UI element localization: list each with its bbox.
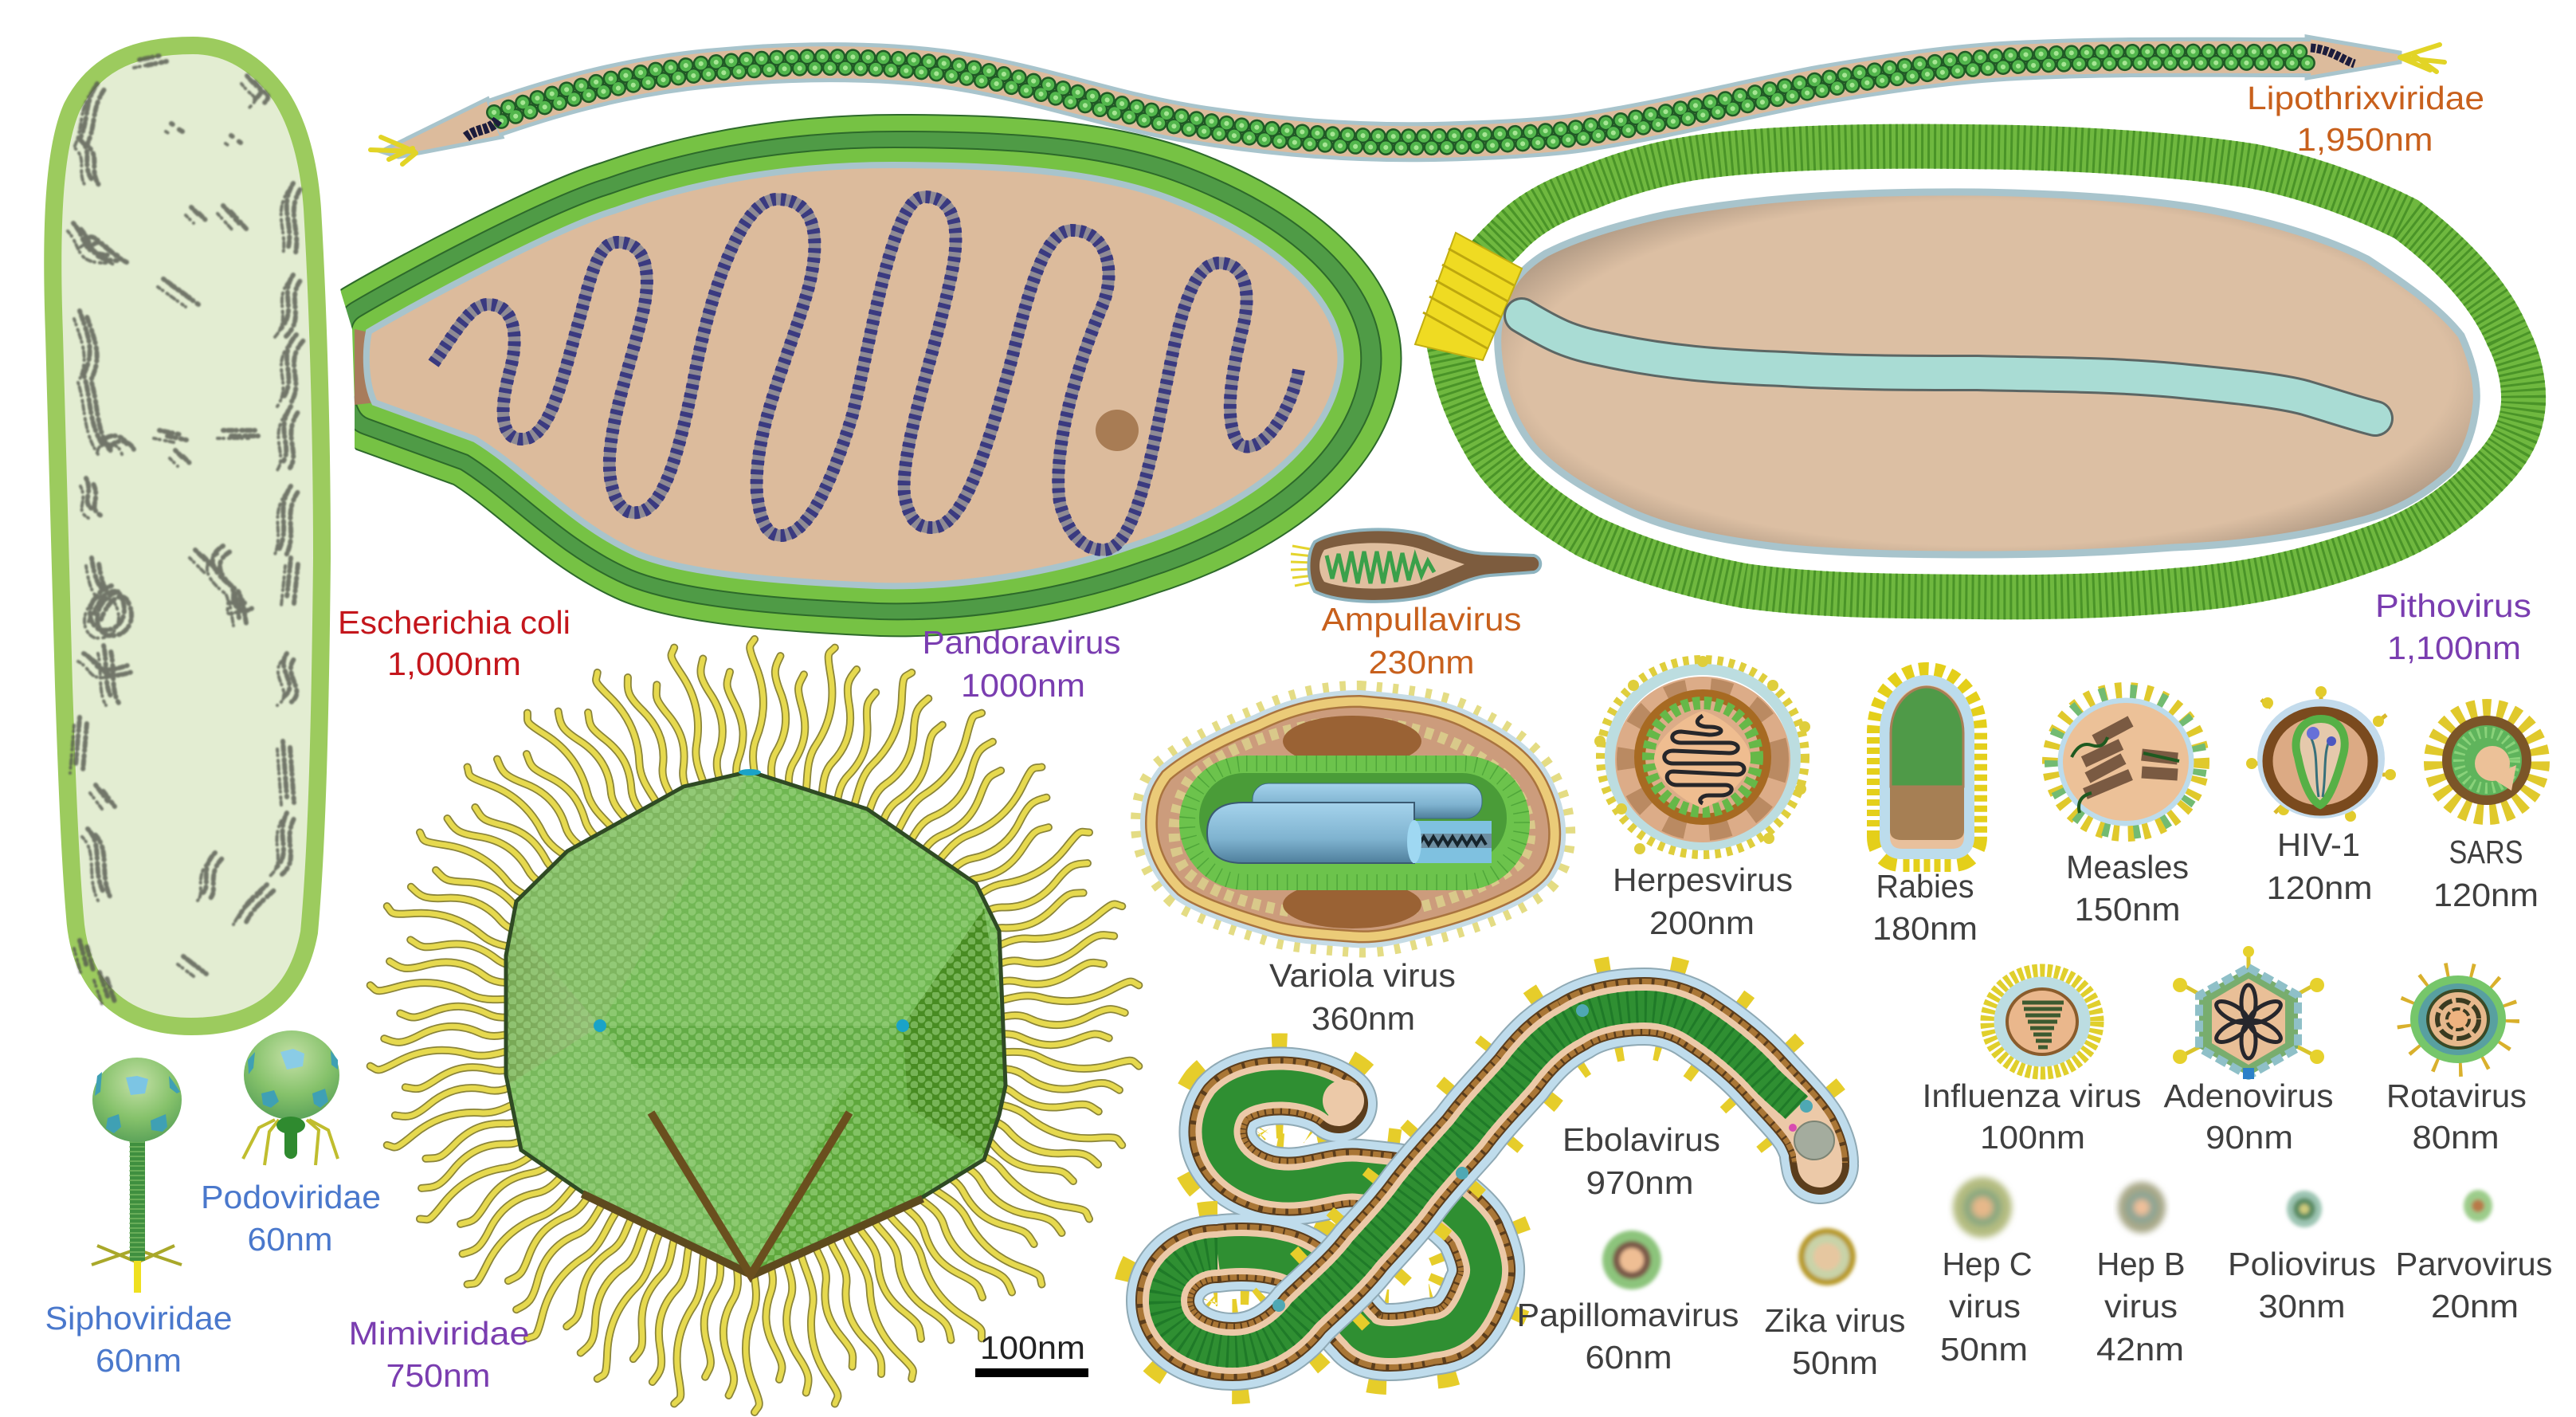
label: Lipothrixviridae: Lipothrixviridae: [2247, 80, 2484, 116]
label: SARS: SARS: [2449, 834, 2523, 870]
label: Zika virus: [1764, 1302, 1906, 1381]
capsid: [508, 775, 1004, 1267]
label: Rabies: 180nm: [1872, 910, 1978, 947]
label: Zika virus: 50nm: [1792, 1344, 1878, 1381]
virus: Siphoviridae: [92, 1058, 182, 1293]
label: Ebolavirus: Ebolavirus: [1562, 1121, 1720, 1158]
label: Herpesvirus: 200nm: [1649, 905, 1755, 941]
label: Variola virus: [1269, 957, 1456, 1037]
label: Parvovirus: Parvovirus: [2395, 1246, 2553, 1282]
label: Hep B virus: [2096, 1246, 2185, 1368]
label: Podoviridae: Podoviridae: [201, 1179, 381, 1215]
virus: Poliovirus: [2287, 1191, 2322, 1227]
scale bar: 100nm: [975, 1329, 1088, 1377]
cell: Escherichia coli: [53, 45, 322, 1026]
virus: Herpesvirus: [1594, 656, 1810, 854]
label: Rabies: Rabies: [1876, 868, 1974, 905]
virus: Rabies: [1890, 685, 1964, 849]
label: Hep C virus: 50nm: [1940, 1331, 2028, 1368]
label: Hep C virus: [1940, 1246, 2032, 1368]
label: Hep C virus: virus: [1949, 1288, 2021, 1325]
label: Parvovirus: 20nm: [2431, 1288, 2519, 1325]
label: Mimiviridae: [349, 1315, 529, 1394]
label: Measles: Measles: [2066, 849, 2189, 885]
label: Escherichia coli: [338, 604, 570, 682]
label: Variola virus: 360nm: [1312, 1000, 1415, 1037]
virus: Variola virus: [1151, 701, 1555, 936]
virus: Podoviridae: [243, 1030, 339, 1165]
label: Papillomavirus: Papillomavirus: [1517, 1297, 1739, 1333]
virus: Influenza: [1988, 971, 2096, 1072]
virus: Lipothrixviridae: [371, 37, 2445, 164]
label: HIV-1: [2266, 826, 2373, 906]
label: Escherichia coli: Escherichia coli: [338, 604, 570, 641]
label: Pandoravirus: [923, 624, 1120, 704]
label: Ampullavirus: 230nm: [1369, 644, 1474, 681]
virus: Pithovirus: [1415, 147, 2523, 597]
virus: Hepatitis B: [2118, 1182, 2166, 1233]
label: Measles: [2066, 849, 2189, 928]
label: Adenovirus: Adenovirus: [2164, 1077, 2333, 1114]
label: Siphoviridae: [45, 1300, 233, 1379]
label: Podoviridae: 60nm: [247, 1221, 333, 1258]
label: Influenza virus: Influenza virus: [1922, 1077, 2142, 1114]
label: HIV-1: HIV-1: [2277, 826, 2360, 863]
cork: [1415, 233, 1522, 360]
virus: HIV-1: [2246, 686, 2396, 822]
label: Mimiviridae: Mimiviridae: [349, 1315, 529, 1352]
label: Hep B virus: Hep B: [2097, 1246, 2185, 1282]
label: Herpesvirus: Herpesvirus: [1613, 862, 1793, 898]
label: HIV-1: 120nm: [2266, 869, 2373, 906]
virus: Mimiviridae: [370, 639, 1139, 1412]
virus: Hepatitis C: [1953, 1177, 2012, 1238]
label: Parvovirus: [2395, 1246, 2553, 1325]
virus: Measles: [2051, 691, 2201, 833]
label: Siphoviridae: Siphoviridae: [45, 1300, 233, 1337]
label: Rabies: [1872, 868, 1978, 947]
label: Pithovirus: Pithovirus: [2375, 587, 2531, 624]
label: Adenovirus: 90nm: [2205, 1119, 2293, 1156]
label: Rotavirus: Rotavirus: [2386, 1077, 2527, 1114]
label: Hep C virus: Hep C: [1943, 1246, 2032, 1282]
label: Siphoviridae: 60nm: [96, 1342, 182, 1379]
dsDNA core tube: [1207, 783, 1492, 863]
label: Podoviridae: [201, 1179, 381, 1258]
label: Variola virus: Variola virus: [1269, 957, 1456, 994]
label: Escherichia coli: 1,000nm: [387, 646, 521, 682]
virus: Rotavirus: [2408, 973, 2508, 1066]
virus: Adenovirus: [2173, 946, 2324, 1079]
label: Zika virus: Zika virus: [1764, 1302, 1906, 1339]
label: Lipothrixviridae: 1,950nm: [2296, 121, 2433, 158]
label: Ebolavirus: [1562, 1121, 1720, 1201]
virus: Ebolavirus: [1165, 1004, 1834, 1352]
surface fibers: [370, 639, 1139, 1412]
label: Hep B virus: 42nm: [2096, 1331, 2184, 1368]
label: Influenza virus: 100nm: [1980, 1119, 2085, 1156]
label: Lipothrixviridae: [2247, 80, 2484, 158]
virus: Zika: [1798, 1228, 1856, 1286]
label: Hep B virus: virus: [2104, 1288, 2178, 1325]
label: Papillomavirus: [1517, 1297, 1739, 1376]
label: SARS: [2433, 834, 2539, 913]
label: Poliovirus: [2228, 1246, 2376, 1325]
virus: Ampullavirus: [1291, 529, 1540, 602]
label: Pandoravirus: 1000nm: [961, 667, 1085, 704]
virus: SARS: [2434, 709, 2539, 814]
label: Poliovirus: Poliovirus: [2228, 1246, 2376, 1282]
label: Pandoravirus: Pandoravirus: [923, 624, 1120, 661]
label: Ampullavirus: [1321, 601, 1522, 681]
label: Rotavirus: [2386, 1077, 2527, 1156]
virus: Parvovirus: [2464, 1190, 2492, 1222]
label: Rotavirus: 80nm: [2413, 1119, 2499, 1156]
label: Influenza virus: [1922, 1077, 2142, 1156]
virus: Pandoravirus: [319, 165, 1351, 586]
label: Ebolavirus: 970nm: [1586, 1164, 1694, 1201]
label: Measles: 150nm: [2075, 891, 2180, 928]
label: Pithovirus: 1,100nm: [2387, 630, 2521, 666]
label: Herpesvirus: [1613, 862, 1793, 941]
label: Adenovirus: [2164, 1077, 2333, 1156]
label: SARS: 120nm: [2433, 877, 2539, 913]
label: Ampullavirus: Ampullavirus: [1321, 601, 1522, 638]
label: Pithovirus: [2375, 587, 2531, 666]
label: Poliovirus: 30nm: [2258, 1288, 2346, 1325]
scale bar: 100nm: 100nm: [980, 1329, 1085, 1366]
label: Papillomavirus: 60nm: [1586, 1339, 1672, 1376]
virus: Papillomavirus: [1602, 1231, 1661, 1289]
label: Mimiviridae: 750nm: [386, 1357, 491, 1394]
